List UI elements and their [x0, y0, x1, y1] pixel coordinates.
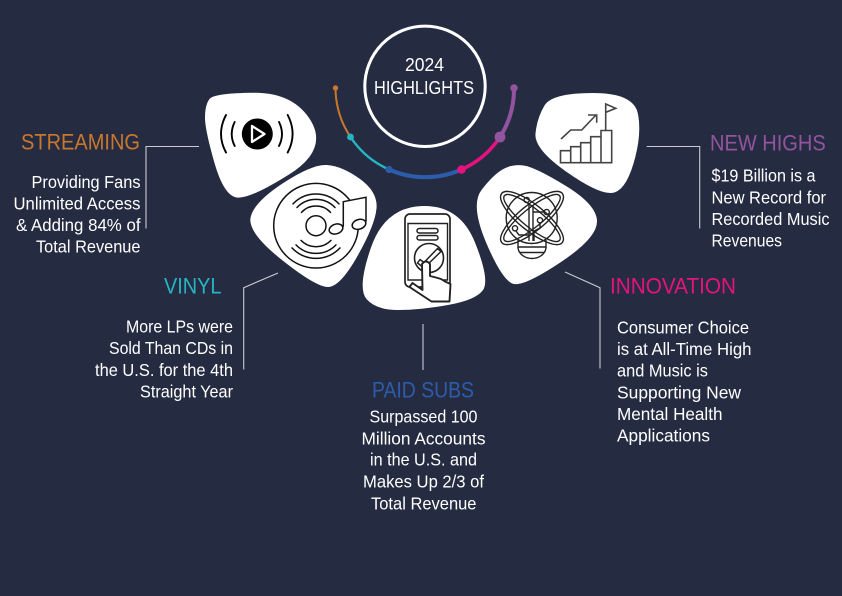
text block: streaming: Providing Fans — [32, 172, 141, 192]
text block: vinyl: VINYL — [164, 273, 222, 298]
text block: new highs: NEW HIGHS — [710, 131, 826, 156]
text block: streaming — [14, 130, 141, 257]
text block: new highs: $19 Billion is a — [712, 166, 816, 186]
text block: streaming: STREAMING — [21, 130, 140, 154]
panel: vinyl icon — [250, 165, 377, 287]
text block: new highs: Revenues — [712, 231, 782, 251]
text block: innovation — [610, 273, 752, 446]
connector: new highs — [647, 146, 700, 228]
text block: streaming: Unlimited Access — [14, 193, 141, 213]
connector: vinyl — [244, 273, 278, 370]
text block: innovation: Applications — [617, 426, 710, 446]
text block: vinyl: the U.S. for the 4th — [95, 360, 233, 380]
text block: vinyl: Straight Year — [140, 382, 233, 402]
text block: vinyl — [95, 273, 233, 402]
text block: innovation: Consumer Choice — [617, 318, 749, 338]
panel: innovation icon — [477, 165, 597, 284]
text block: innovation: is at All-Time High — [617, 339, 752, 359]
panel: new highs icon — [535, 93, 639, 193]
text block: paid subs — [362, 377, 486, 513]
coloured arc timeline — [333, 84, 518, 177]
text block: innovation: and Music is — [617, 361, 708, 381]
title circle — [365, 26, 485, 146]
text block: new highs: New Record for — [712, 187, 826, 207]
text block: innovation: Supporting New — [617, 382, 741, 402]
text block: innovation: Mental Health — [617, 404, 722, 424]
text block: streaming: & Adding 84% of — [16, 215, 141, 235]
text block: paid subs: Million Accounts — [362, 428, 486, 448]
title circle: HIGHLIGHTS — [374, 77, 474, 98]
text block: paid subs: in the U.S. and — [370, 450, 477, 470]
text block: paid subs: PAID SUBS — [372, 377, 474, 402]
text block: vinyl: More LPs were — [126, 317, 233, 337]
connector: paid subs — [422, 324, 424, 370]
connector: streaming — [146, 146, 199, 228]
connector: innovation — [565, 272, 600, 368]
text block: new highs: Recorded Music — [712, 209, 830, 229]
panel: streaming icon — [205, 93, 316, 198]
text block: paid subs: Total Revenue — [371, 493, 476, 513]
text block: paid subs: Surpassed 100 — [370, 406, 478, 426]
text block: new highs — [710, 131, 830, 251]
text block: innovation: INNOVATION — [610, 273, 736, 298]
panel: paid subs icon — [363, 206, 485, 310]
text block: vinyl: Sold Than CDs in — [109, 338, 233, 358]
title circle: 2024 — [405, 54, 444, 75]
text block: paid subs: Makes Up 2/3 of — [363, 471, 484, 491]
text block: streaming: Total Revenue — [36, 237, 140, 257]
